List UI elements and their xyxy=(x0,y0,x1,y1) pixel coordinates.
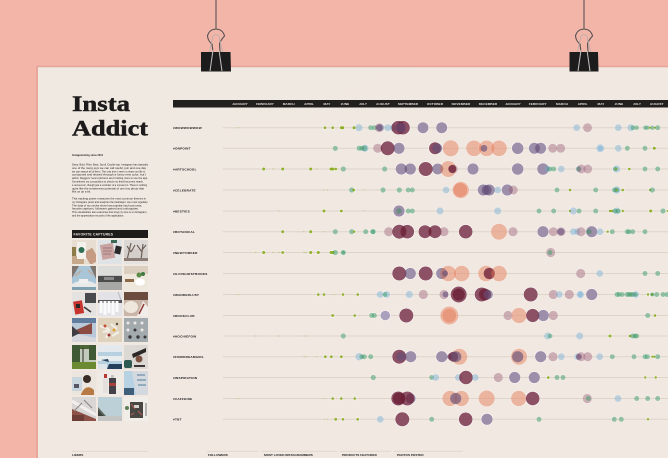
row: #celebrate xyxy=(173,182,668,198)
photo grid xyxy=(72,240,148,421)
text block: intro: one of the many joys we can call useful, join and one day xyxy=(72,166,146,170)
text block: intro: we can search all of them. The only time I seem to share out life is xyxy=(72,169,145,173)
footer stats headings: LIKERS xyxy=(72,453,83,457)
text block: intro: Deep. Bold. Filter. Beat. Scroll. Double tap. Instagram has basically xyxy=(72,162,148,166)
text block: intro: lifts us up a bit. xyxy=(72,190,91,194)
title: Insta xyxy=(72,91,130,116)
month header bar: APRIL xyxy=(304,102,314,106)
row: #botanical: #BOTANICAL xyxy=(173,230,195,234)
row: #ilovehostbooks xyxy=(173,266,668,281)
text block: intro: a nervous tic, though just a reminder of a moment in. There is nothing xyxy=(72,183,147,187)
month header bar: AUGUST xyxy=(650,102,664,106)
row: #newyorker: #NEWYORKER xyxy=(173,251,198,255)
month header bar: DECEMBER xyxy=(479,102,498,106)
row: #newyorker xyxy=(173,248,668,257)
row: #onpoint xyxy=(173,140,668,156)
text block: intro xyxy=(72,162,148,218)
month header bar: AUGUST xyxy=(376,102,390,106)
month header bar: FEBRUARY xyxy=(529,102,547,106)
month header bar: MARCH xyxy=(283,102,295,106)
row: #besties: #BESTIES xyxy=(173,209,190,213)
row: #caffeine: #CAFFEINE xyxy=(173,397,192,401)
row: #tbt xyxy=(173,412,668,426)
row: #besties xyxy=(173,205,668,217)
heading: favorite captures xyxy=(72,230,148,238)
icon: left binder clip xyxy=(201,0,231,72)
text block: intro: favorite captions, followers gained and unforgotten. xyxy=(72,207,139,211)
footer stats headings: PRODUCTS FEATURED xyxy=(342,453,378,457)
title: Addict xyxy=(72,116,149,141)
month header bar: OCTOBER xyxy=(427,102,444,106)
icon: right binder clip xyxy=(570,0,598,72)
row: #bookclub: #BOOKCLUB xyxy=(173,314,195,318)
panel: favorite captures xyxy=(72,230,148,421)
row: #celebrate: #CELEBRATE xyxy=(173,188,196,192)
footer stats headings: FOLLOWERS xyxy=(208,453,228,457)
text block: intro: quite like the tenderness potential of one tiny photo that xyxy=(72,186,144,190)
text block: intro: admit: bloggers' recent pictures aren't letting more to use the app. xyxy=(72,176,148,180)
month header bar: MAY xyxy=(598,102,605,106)
month header bar: APRIL xyxy=(578,102,588,106)
heading: favorite captures: FAVORITE CAPTURES xyxy=(74,232,114,236)
month header bar: FEBRUARY xyxy=(256,102,275,106)
text block: intro: and the appreciation records of the application. xyxy=(72,214,124,218)
month header bar: SEPTEMBER xyxy=(398,102,419,106)
row: #wowwowwow: #WOWWOWWOW xyxy=(173,126,202,130)
footer stats headings: MOST LOVED INSTAGRAMMERS xyxy=(264,453,313,457)
text block: intro: my Instagram posts and analyzes the hashtags I use most regularly. xyxy=(72,200,148,204)
month header bar: JULY xyxy=(633,102,642,106)
row: #wowwowwow xyxy=(173,121,668,134)
row: #hochiefow xyxy=(173,332,668,340)
month header bar: NOVEMBER xyxy=(452,102,471,106)
row: #wanderlust xyxy=(173,286,668,302)
month header bar: JANUARY xyxy=(232,102,249,106)
row: #bookclub xyxy=(173,306,668,324)
footer stats headings: PHOTOS POSTED xyxy=(397,453,424,457)
text block: intro: The data of my circles show how popular each post was, xyxy=(72,203,142,207)
row: #hochiefow: #HOCHIEFOW xyxy=(173,334,196,338)
month header bar: JUNE xyxy=(341,102,349,106)
text block: intro: Sometimes my compulsion to check my feed becomes nearly xyxy=(72,180,143,184)
row: #tbt: #TBT xyxy=(173,418,182,422)
row: #inspiration: #INSPIRATION xyxy=(173,376,198,380)
month header bar: JUNE xyxy=(615,102,623,106)
month header bar: MARCH xyxy=(556,102,569,106)
row: #artschool xyxy=(173,161,668,177)
row: #findbreamgirl xyxy=(173,349,668,365)
month header bar: JULY xyxy=(359,102,368,106)
row: #wanderlust: #WANDERLUST xyxy=(173,293,199,297)
title xyxy=(72,91,149,141)
row: #artschool: #ARTSCHOOL xyxy=(173,167,197,171)
month header bar: MAY xyxy=(324,102,331,106)
row: #ilovehostbooks: #ILOVEHOSTBOOKS xyxy=(173,272,208,276)
row: #botanical xyxy=(173,224,668,240)
text block: intro: This tracking poster measures the most common themes in xyxy=(72,196,146,200)
row: #inspiration xyxy=(173,371,668,384)
month header bar xyxy=(173,100,668,108)
text block: intro: composed and shared through a funny new color, but I xyxy=(72,173,146,177)
month header bar: JANUARY xyxy=(505,102,522,106)
row: #caffeine xyxy=(173,390,668,406)
footer stats headings xyxy=(72,451,463,457)
row: #onpoint: #ONPOINT xyxy=(173,147,191,151)
text block: intro: This visualization also examines how long my time is on Instagram, xyxy=(72,210,147,214)
subtitle: Instagramming since 2014 xyxy=(72,153,103,157)
row: #findbreamgirl: #FINDDREAMGIRL xyxy=(173,355,204,359)
